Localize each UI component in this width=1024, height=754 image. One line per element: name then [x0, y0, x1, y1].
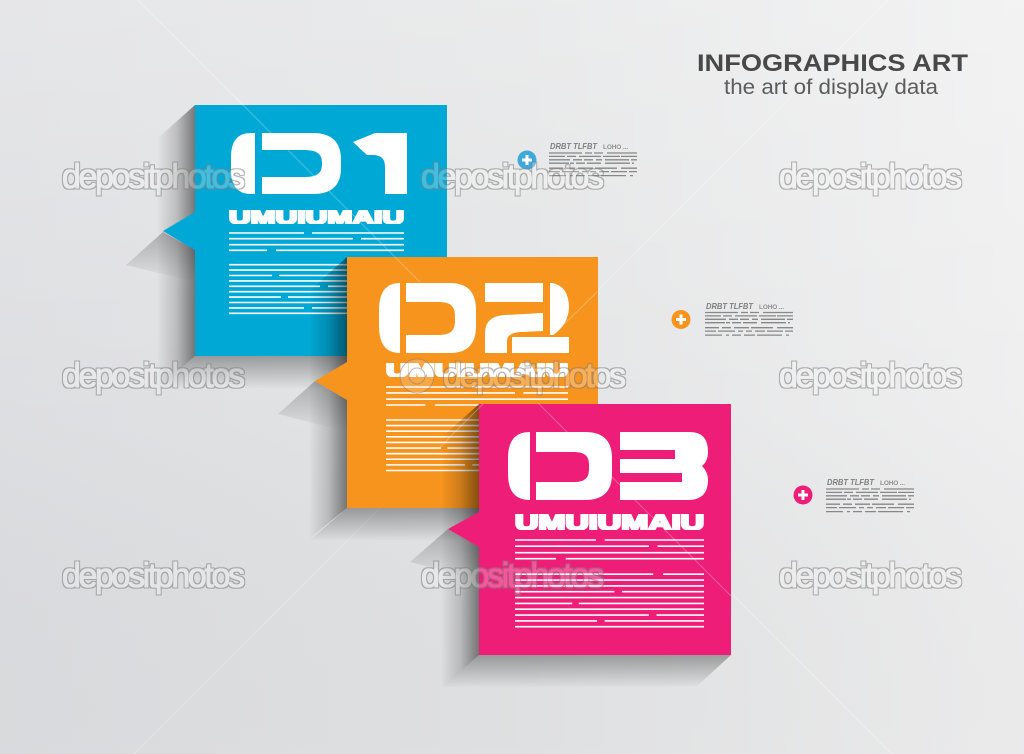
card 02 number: 2 — [485, 264, 569, 374]
card 01 text lines — [229, 233, 404, 313]
diagonal light lines over cards — [233, 95, 731, 596]
subtitle: the art of display data — [724, 76, 938, 99]
panel: card 02 — [278, 257, 598, 540]
title: INFOGRAPHICS ART — [697, 50, 968, 77]
card 03 heading: UMUIUMAIU — [515, 510, 704, 535]
card 03 text lines — [515, 540, 704, 627]
watermark bottom right: depositphotos — [779, 557, 962, 595]
item 3 lines — [826, 489, 914, 512]
card 02 body with pointer — [315, 257, 598, 508]
item 1 lines — [549, 153, 637, 176]
watermark middle centre: depositphotos — [443, 357, 626, 395]
card 03 number: 0 — [508, 414, 612, 521]
icon: blue plus — [518, 150, 536, 170]
item 3 label: DRBT TLFBT — [827, 477, 875, 487]
card 02 number — [379, 283, 569, 353]
watermark middle left: depositphotos — [62, 357, 245, 395]
icon: pink plus — [794, 486, 812, 504]
panel: card 03 — [410, 404, 731, 687]
card 03 number: 3 — [620, 414, 708, 521]
callout: item 1 — [518, 141, 637, 176]
card 01 heading: UMUIUMAIU — [229, 207, 404, 229]
watermark top left: depositphotos — [62, 158, 245, 196]
watermark bottom left: depositphotos — [62, 557, 245, 595]
watermark bottom centre: depositphotos — [421, 557, 604, 595]
callout: item 2 — [672, 301, 793, 335]
callout: item 3 — [794, 477, 914, 512]
icon: orange plus — [672, 310, 690, 329]
item 2 meta: LOHO ... — [759, 304, 784, 311]
watermark top centre: depositphotos — [421, 158, 604, 196]
item 2 label: DRBT TLFBT — [706, 301, 754, 311]
watermark top right: depositphotos — [779, 158, 962, 196]
card 01 number: 1 — [353, 118, 407, 213]
item 1 label: DRBT TLFBT — [550, 141, 598, 151]
card 03 body with pointer — [448, 404, 731, 655]
card 01 number: 0 — [231, 118, 341, 213]
card 02 heading: UMUIUMAIU — [386, 360, 568, 382]
watermarks — [62, 158, 962, 595]
card 03 shadow — [410, 404, 731, 687]
panel: card 01 — [126, 105, 447, 388]
card 01 number — [231, 133, 407, 194]
item 2 lines — [705, 312, 793, 335]
card 02 text lines — [386, 387, 568, 471]
card 02 number: 0 — [379, 264, 476, 374]
card 01 body with pointer — [163, 105, 447, 356]
card 02 shadow — [278, 257, 598, 540]
card 03 number — [508, 432, 708, 500]
item 1 meta: LOHO ... — [603, 144, 628, 151]
card 01 shadow — [126, 105, 447, 388]
watermark middle right: depositphotos — [779, 357, 962, 395]
item 3 meta: LOHO ... — [880, 480, 905, 487]
